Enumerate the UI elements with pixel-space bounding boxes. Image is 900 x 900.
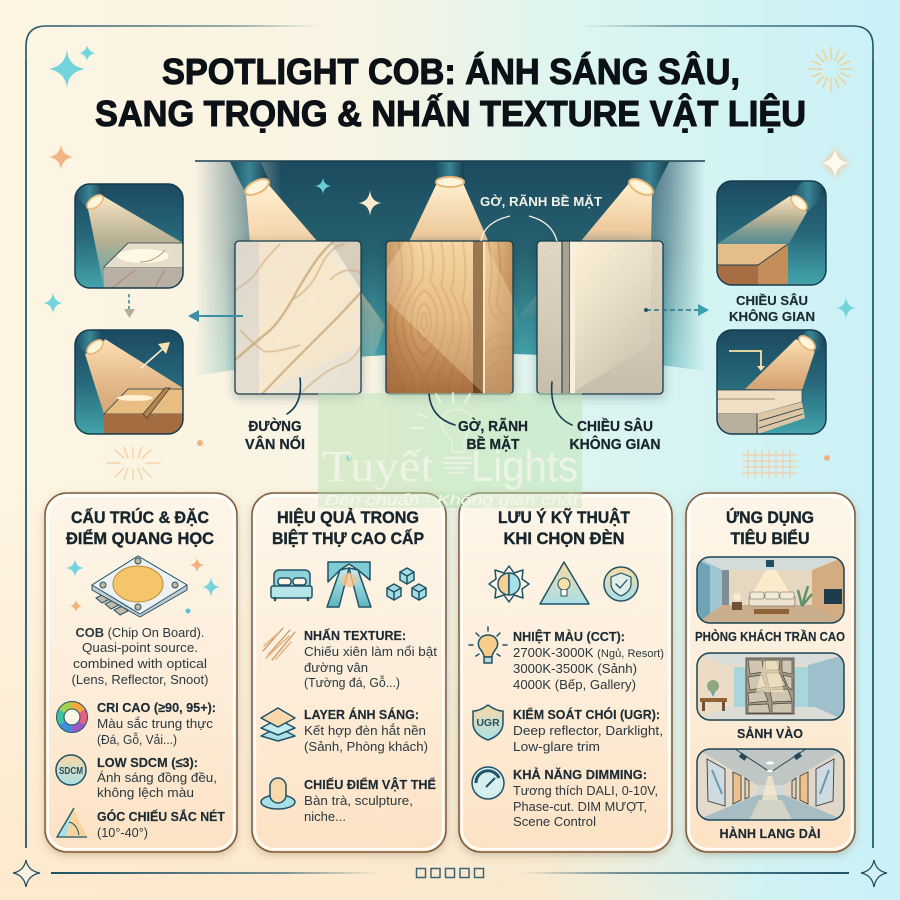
item: SDCM: SDCM xyxy=(59,766,83,777)
watermark: Tuyết xyxy=(322,442,434,491)
ceiling line xyxy=(195,160,705,162)
item: layer ánh sáng: LAYER ÁNH SÁNG: xyxy=(304,707,419,722)
callout: đường vân nổi xyxy=(245,378,305,453)
item: nhiệt màu: 2700K-3000K (Ngủ, Resort) xyxy=(513,645,664,660)
callout: gờ rãnh bề mặt xyxy=(429,394,528,453)
item: layer ánh sáng: Kết hợp đèn hắt nền xyxy=(304,723,426,738)
heading xyxy=(272,508,424,548)
heading: CẤU TRÚC & ĐẶC xyxy=(71,508,209,527)
star: scene cream xyxy=(358,190,382,216)
heading: KHI CHỌN ĐÈN xyxy=(504,529,624,548)
heading xyxy=(498,507,631,548)
item: dimming: Phase-cut. DIM MƯỢT, xyxy=(513,799,647,814)
spotlight right xyxy=(627,162,669,198)
watermark tagline over cards: Đèn chuẩn - Không gian chất xyxy=(325,492,579,509)
item: chiếu điểm vật thể: CHIẾU ĐIỂM VẬT THỂ xyxy=(304,777,436,792)
decorative sparkles xyxy=(43,45,856,461)
arrow: dashed right xyxy=(644,304,709,316)
watermark: Lights xyxy=(471,442,578,491)
inset: wood groove spotlight xyxy=(75,330,183,434)
item: UGR: KIỂM SOÁT CHÓI (UGR): xyxy=(513,707,660,722)
image: long corridor xyxy=(697,749,844,820)
light beams xyxy=(246,182,652,394)
panel: lưu ý kỹ thuật khi chọn đèn xyxy=(459,493,672,852)
caption: phòng khách trần cao: PHÒNG KHÁCH TRẦN CAO xyxy=(695,629,845,644)
icon: burst top right xyxy=(809,47,853,92)
item: nhấn texture: (Tường đá, Gỗ...) xyxy=(304,675,400,690)
item: nhiệt màu: 4000K (Bếp, Gallery) xyxy=(513,677,636,692)
title: SPOTLIGHT COB: ÁNH SÁNG SÂU, xyxy=(162,50,740,92)
icon: cubes xyxy=(387,568,426,600)
title xyxy=(95,50,806,134)
heading xyxy=(66,508,214,548)
heading: BIỆT THỰ CAO CẤP xyxy=(272,529,424,548)
arrow: marble to insets xyxy=(188,310,243,322)
heading: LƯU Ý KỸ THUẬT xyxy=(498,507,631,527)
callout: đường vân nổi: VÂN NỔI xyxy=(245,435,305,453)
panel: hiệu quả trong biệt thự cao cấp xyxy=(252,493,446,852)
ceiling backdrop xyxy=(195,161,705,376)
callout: đường vân nổi: ĐƯỜNG xyxy=(248,417,302,435)
callout: chiều sâu không gian: KHÔNG GIAN xyxy=(570,435,660,453)
spotlight left xyxy=(230,162,271,198)
item: nhấn texture xyxy=(263,628,437,690)
icon: sun xyxy=(489,566,529,602)
item: nhấn texture: NHẤN TEXTURE: xyxy=(304,628,406,643)
item: CRI xyxy=(56,700,216,747)
caption: hành lang dài: HÀNH LANG DÀI xyxy=(720,826,820,841)
icon: grid pattern xyxy=(742,450,798,478)
text: COB description: (Lens, Reflector, Snoot) xyxy=(72,672,208,687)
inset: layered stone edge xyxy=(717,330,826,434)
text: COB description: COB (Chip On Board). xyxy=(76,625,204,640)
callout: chiều sâu không gian xyxy=(552,382,660,453)
item: beam angle: GÓC CHIẾU SẮC NÉT xyxy=(97,809,225,824)
image: living room xyxy=(697,557,844,623)
item: UGR xyxy=(473,705,663,754)
callout: gờ rãnh bề mặt top: GỜ, RÃNH BỀ MẶT xyxy=(480,194,602,209)
title: SANG TRỌNG & NHẤN TEXTURE VẬT LIỆU xyxy=(95,92,806,134)
star: scene teal xyxy=(315,178,331,194)
heading: TIÊU BIỂU xyxy=(730,529,810,548)
footer: ornament line and squares xyxy=(51,868,849,878)
icon: curtain light xyxy=(327,562,371,607)
icon: bed xyxy=(271,570,312,600)
callout: gờ rãnh bề mặt top xyxy=(480,194,602,241)
item: CRI: CRI CAO (≥90, 95+): xyxy=(97,700,216,715)
inset: wood block xyxy=(717,181,826,285)
item: layer ánh sáng: (Sảnh, Phòng khách) xyxy=(304,739,428,754)
callout: gờ rãnh bề mặt: BỀ MẶT xyxy=(466,436,520,453)
item: UGR: Deep reflector, Darklight, xyxy=(513,723,663,738)
item: chiếu điểm vật thể: niche... xyxy=(304,809,346,824)
caption: sảnh vào: SẢNH VÀO xyxy=(737,726,803,741)
item: CRI: Màu sắc trung thực xyxy=(97,716,214,731)
inset: marble slab spotlight xyxy=(75,184,183,288)
item: nhiệt màu: 3000K-3500K (Sảnh) xyxy=(513,661,637,676)
item: SDCM: Ánh sáng đồng đều, xyxy=(97,770,217,785)
item: beam angle xyxy=(57,808,225,840)
callout: gờ rãnh bề mặt: GỜ, RÃNH xyxy=(458,417,528,435)
panel: ứng dụng tiêu biểu xyxy=(686,493,855,852)
item: layer ánh sáng xyxy=(261,707,428,754)
text: COB description: Quasi-point source. xyxy=(82,640,198,655)
icon: footer star left xyxy=(13,860,40,887)
spotlight center xyxy=(436,162,464,187)
item: SDCM: LOW SDCM (≤3): xyxy=(97,755,198,770)
item: nhấn texture: Chiếu xiên làm nổi bật xyxy=(304,644,437,659)
text: COB description xyxy=(72,625,208,687)
item: SDCM xyxy=(56,755,217,800)
scene: spotlit material panels xyxy=(195,161,705,394)
item: UGR: Low-glare trim xyxy=(513,739,600,754)
item: CRI: (Đá, Gỗ, Vải...) xyxy=(97,732,177,747)
item: dimming xyxy=(472,767,658,829)
icon: COB chip xyxy=(92,556,187,617)
heading: ĐIỂM QUANG HỌC xyxy=(66,529,214,548)
item: dimming: Scene Control xyxy=(513,814,596,829)
watermark xyxy=(318,393,582,508)
image: entrance hall xyxy=(697,653,844,720)
item: chiếu điểm vật thể: Bàn trà, sculpture, xyxy=(304,793,413,808)
panel: linen xyxy=(537,241,663,394)
callout: chiều sâu không gian: CHIỀU SÂU xyxy=(577,417,653,435)
panel: cấu trúc và đặc điểm quang học xyxy=(45,493,237,852)
panel: marble xyxy=(235,241,361,394)
item: SDCM: không lệch màu xyxy=(97,785,194,800)
sparkles around chip xyxy=(66,558,220,614)
item: nhiệt màu xyxy=(469,627,664,692)
item: nhấn texture: đường vân xyxy=(304,660,368,675)
item: beam angle: (10°-40°) xyxy=(97,825,148,840)
text: COB description: combined with optical xyxy=(73,656,207,671)
heading xyxy=(726,508,814,548)
item: dimming: Tương thích DALI, 0-10V, xyxy=(513,783,658,798)
icon: burst lower left xyxy=(107,447,160,480)
icon: shield check xyxy=(604,567,638,601)
icon: footer star right xyxy=(861,860,887,887)
icon: warning bulb triangle xyxy=(540,562,589,604)
panel: wood xyxy=(386,241,513,394)
item: UGR: UGR xyxy=(476,717,500,729)
label: chiều sâu không gian right: KHÔNG GIAN xyxy=(729,309,815,324)
label: chiều sâu không gian right xyxy=(729,293,815,324)
heading: ỨNG DỤNG xyxy=(726,508,814,527)
label: chiều sâu không gian right: CHIỀU SÂU xyxy=(736,293,808,308)
heading: HIỆU QUẢ TRONG xyxy=(277,508,419,527)
item: nhiệt màu: NHIỆT MÀU (CCT): xyxy=(513,629,625,644)
item: chiếu điểm vật thể xyxy=(261,777,436,824)
item: dimming: KHẢ NĂNG DIMMING: xyxy=(513,767,647,782)
arrow: dashed down xyxy=(124,294,135,318)
